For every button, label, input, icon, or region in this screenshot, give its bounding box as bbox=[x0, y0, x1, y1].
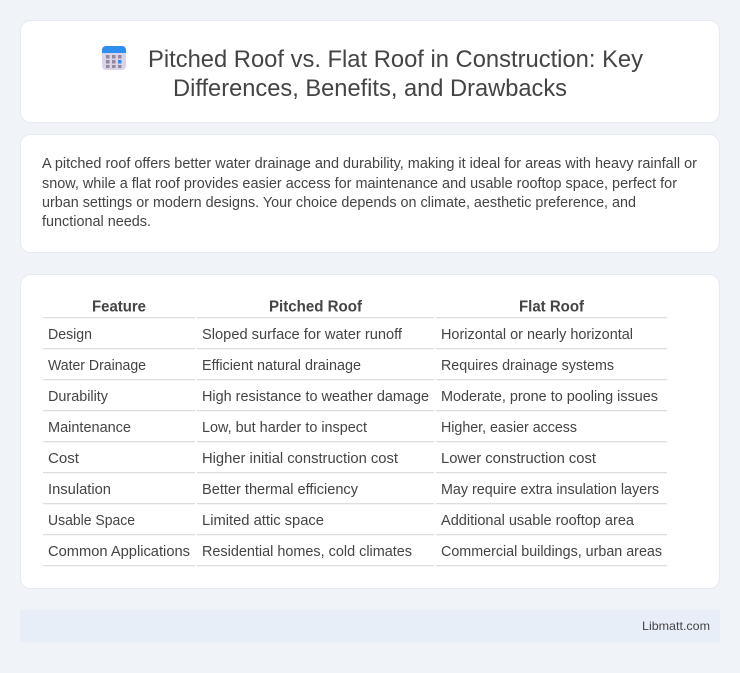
row: maintenance: Higher, easier access bbox=[441, 420, 577, 436]
footer bbox=[20, 610, 720, 642]
table header: Flat Roof bbox=[519, 298, 585, 316]
row: durability: Moderate, prone to pooling issues bbox=[441, 389, 658, 405]
text block: introduction: A pitched roof offers better water drainage and durability, making it ideal for areas with heavy rainfall or bbox=[42, 156, 697, 172]
panel: title header bbox=[20, 20, 720, 122]
row: water drainage: Water Drainage bbox=[48, 358, 146, 374]
row: usable space bbox=[48, 513, 634, 529]
row: common applications: Commercial buildings, urban areas bbox=[441, 544, 662, 560]
panel: introduction bbox=[20, 134, 720, 252]
row: cost: Higher initial construction cost bbox=[202, 451, 398, 467]
row: durability: High resistance to weather damage bbox=[202, 389, 429, 405]
row: water drainage: Requires drainage systems bbox=[441, 358, 614, 374]
text block: introduction: functional needs. bbox=[42, 214, 151, 230]
text block: introduction: urban settings or modern designs. Your choice depends on climate, aesthetic preference, and bbox=[42, 195, 636, 211]
table header: Pitched Roof bbox=[269, 298, 363, 316]
row: design: Sloped surface for water runoff bbox=[202, 327, 403, 343]
row: usable space: Usable Space bbox=[48, 513, 135, 529]
row: usable space: Additional usable rooftop area bbox=[441, 513, 634, 529]
row: common applications: Residential homes, cold climates bbox=[202, 544, 412, 560]
row: water drainage bbox=[48, 358, 614, 374]
row: cost: Cost bbox=[48, 451, 79, 467]
text block: introduction: snow, while a flat roof provides easier access for maintenance and usable rooftop space, perfect for bbox=[42, 176, 677, 192]
row: common applications: Common Applications bbox=[48, 544, 190, 560]
panel: comparison table bbox=[20, 274, 720, 588]
table header bbox=[92, 298, 585, 316]
row: usable space: Limited attic space bbox=[202, 513, 324, 529]
row: cost: Lower construction cost bbox=[441, 451, 596, 467]
row: water drainage: Efficient natural drainage bbox=[202, 358, 361, 374]
row: maintenance bbox=[48, 420, 577, 436]
row: design: Design bbox=[48, 327, 92, 343]
row: design bbox=[48, 327, 633, 343]
row: durability: Durability bbox=[48, 389, 109, 405]
title: Pitched Roof vs. Flat Roof in Construction: Key bbox=[148, 46, 643, 73]
row: insulation: Insulation bbox=[48, 482, 111, 498]
icon: calendar bbox=[102, 46, 126, 70]
row: cost bbox=[48, 451, 596, 467]
row: design: Horizontal or nearly horizontal bbox=[441, 327, 633, 343]
row: common applications bbox=[48, 544, 662, 560]
row: insulation bbox=[48, 482, 659, 498]
title bbox=[148, 46, 643, 102]
text block: introduction bbox=[42, 156, 697, 230]
footer: Libmatt.com bbox=[642, 619, 710, 633]
row: maintenance: Maintenance bbox=[48, 420, 131, 436]
row: durability bbox=[48, 389, 658, 405]
row: insulation: May require extra insulation layers bbox=[441, 482, 659, 498]
table header: Feature bbox=[92, 298, 146, 316]
row: insulation: Better thermal efficiency bbox=[202, 482, 359, 498]
title: Differences, Benefits, and Drawbacks bbox=[173, 75, 567, 102]
row: maintenance: Low, but harder to inspect bbox=[202, 420, 367, 436]
